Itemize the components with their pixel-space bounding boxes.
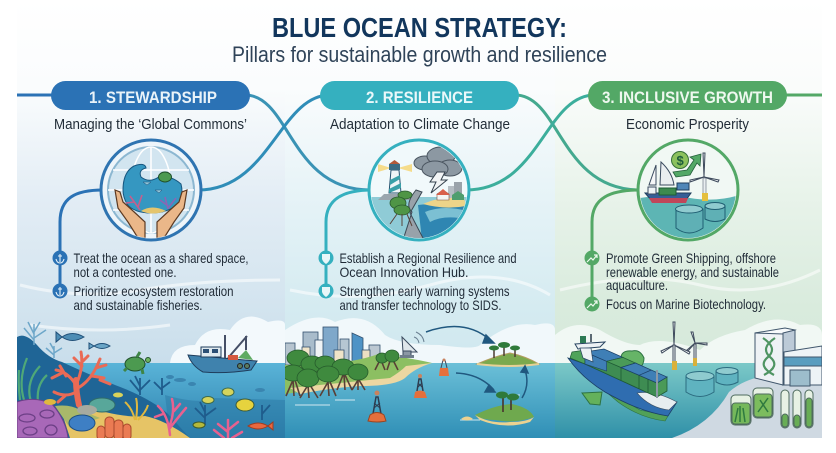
column 1 header: stewardship xyxy=(51,81,250,110)
icon: biotech shore xyxy=(672,375,822,438)
sand floor xyxy=(64,412,190,438)
icon: turtle xyxy=(124,352,150,374)
column 3 header: inclusive growth xyxy=(588,81,787,110)
pill heading xyxy=(320,81,519,110)
icon: pink coral xyxy=(155,399,242,438)
panel: coastal scene resilience xyxy=(282,318,555,438)
icon: anchor bullet xyxy=(52,284,68,298)
subtitle: Pillars for sustainable growth and resilience xyxy=(232,42,607,67)
bullet text: renewable energy, and sustainable xyxy=(606,264,779,280)
icon: anchor bullet xyxy=(52,250,68,266)
connector lines xyxy=(17,95,822,308)
icon: growth bullet xyxy=(584,250,600,266)
bullets: stewardship xyxy=(52,250,248,313)
icon: purple coral xyxy=(17,399,68,438)
column 2 subheading: Adaptation to Climate Change xyxy=(330,117,510,133)
icon: blue fan coral xyxy=(24,322,62,358)
icon: fishing boat xyxy=(188,335,257,373)
icon: seaweed xyxy=(19,358,47,402)
title: BLUE OCEAN STRATEGY: xyxy=(272,12,567,43)
icon: buoys xyxy=(368,358,449,422)
icon: yellow coral xyxy=(125,398,148,420)
column 2 header: resilience: 2. RESILIENCE xyxy=(366,88,473,107)
icon: dark fan coral xyxy=(130,376,270,425)
column 1 subheading: Managing the ‘Global Commons’ xyxy=(54,117,247,133)
icon: offshore wind turbines xyxy=(661,322,707,370)
icon: ship, finance and wind medallion: $ xyxy=(676,153,684,168)
bullet text: Prioritize ecosystem restoration xyxy=(74,283,234,299)
icon: lower island xyxy=(461,392,534,426)
bullet text: Promote Green Shipping, offshore xyxy=(606,250,776,266)
column 1 header: stewardship: 1. STEWARDSHIP xyxy=(89,88,217,107)
arrows between islands xyxy=(426,327,528,398)
column 2 header: resilience xyxy=(320,81,519,110)
icon: aquaculture pens xyxy=(686,368,738,396)
icon: shield bullet xyxy=(318,250,334,266)
icon: lighthouse and storm medallion xyxy=(369,140,470,240)
icon: radar dish xyxy=(400,332,424,358)
bullet text: Establish a Regional Resilience and xyxy=(340,250,516,266)
column 3 header: inclusive growth: 3. INCLUSIVE GROWTH xyxy=(602,88,773,107)
bullets: resilience xyxy=(318,250,516,313)
panel: ocean scene stewardship xyxy=(17,317,285,440)
icon: ship, finance and wind medallion xyxy=(638,140,738,240)
panel: shipping scene inclusive growth xyxy=(555,320,822,438)
icon: growth bullet xyxy=(584,296,600,312)
icon: orange coral xyxy=(52,352,110,405)
icon: blue brain coral xyxy=(69,415,95,431)
icon: container ship xyxy=(568,334,677,421)
icon: city skyline xyxy=(285,327,380,368)
icon: specimen jars xyxy=(731,388,813,428)
bullet text: Ocean Innovation Hub. xyxy=(340,264,468,280)
icon: tube coral xyxy=(97,417,131,440)
bullet text: Focus on Marine Biotechnology. xyxy=(606,296,766,312)
land and beach xyxy=(285,353,432,394)
icon: shield bullet xyxy=(318,284,334,298)
pill heading xyxy=(588,81,787,110)
icon: upper island xyxy=(477,342,539,366)
bullet text: and sustainable fisheries. xyxy=(74,297,202,313)
bullet text: not a contested one. xyxy=(74,264,176,280)
bullet text: Treat the ocean as a shared space, xyxy=(74,250,248,266)
bullets: inclusive growth xyxy=(584,250,779,312)
column 3 subheading: Economic Prosperity xyxy=(626,117,750,133)
icon: mangrove trees xyxy=(282,350,399,398)
icon: fish group xyxy=(56,332,273,430)
bullet text: and transfer technology to SIDS. xyxy=(340,297,502,313)
icon: globe and hands medallion xyxy=(101,140,201,240)
bullet text: Strengthen early warning systems xyxy=(340,283,510,299)
bullet text: aquaculture. xyxy=(606,277,668,293)
pill heading xyxy=(51,81,250,110)
icon: dna lab building xyxy=(755,328,822,386)
